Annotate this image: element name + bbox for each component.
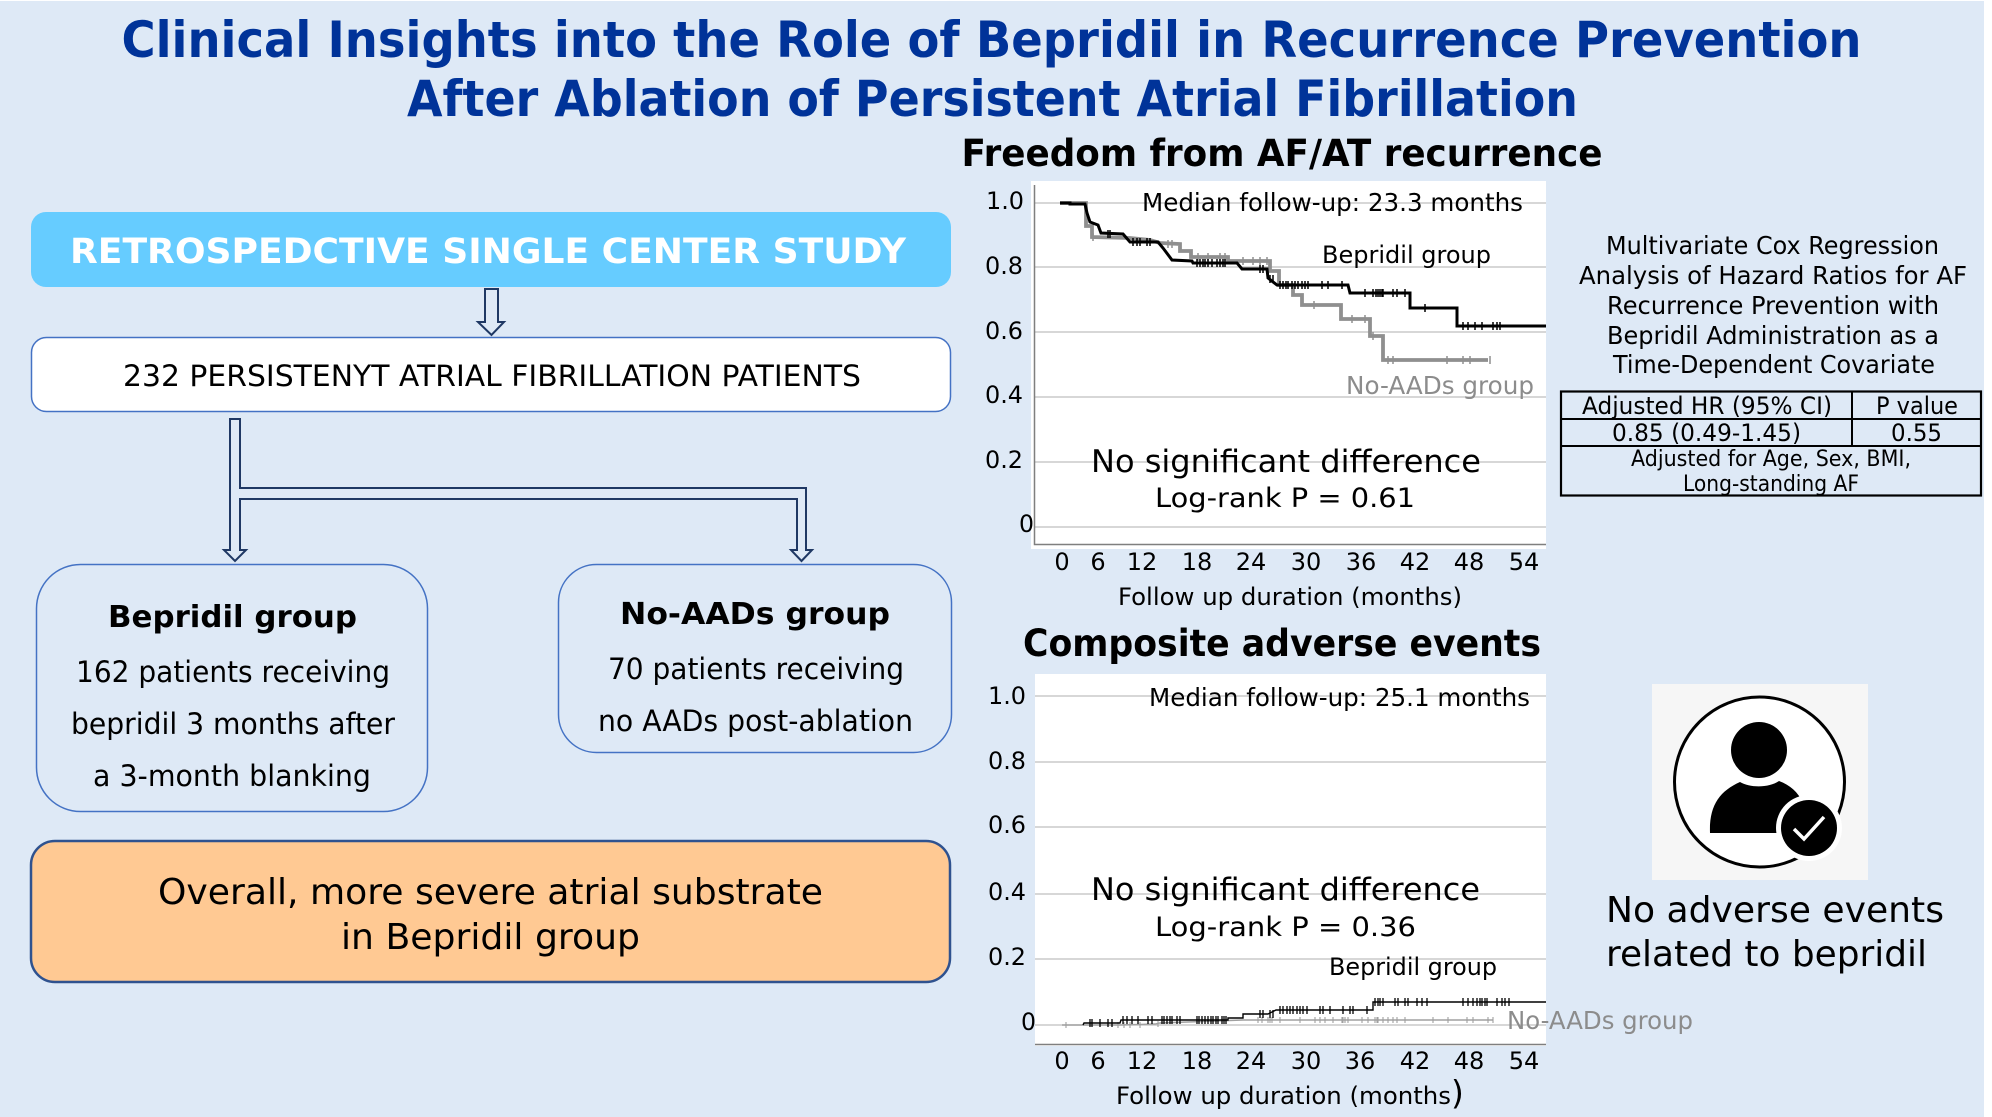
y axis labels: 0.8 xyxy=(985,252,1023,280)
y axis labels: 0 xyxy=(1019,510,1034,538)
Cox regression heading xyxy=(1579,231,1967,379)
x axis title xyxy=(1116,1073,1464,1112)
panel: No-AADs group: No-AADs group xyxy=(620,597,890,632)
x axis labels: 6 xyxy=(1090,1047,1106,1075)
y axis labels: 0.2 xyxy=(985,446,1023,474)
panel: No-AADs group xyxy=(558,564,952,752)
x axis labels: 54 xyxy=(1509,548,1539,576)
safety statement: No adverse events xyxy=(1606,890,1944,931)
y axis labels: 0.6 xyxy=(988,811,1026,839)
x axis labels: 54 xyxy=(1509,1047,1539,1075)
safety statement xyxy=(1606,890,1944,975)
result: no significant difference: No significant difference xyxy=(1091,444,1481,480)
y axis labels: 0.4 xyxy=(988,878,1026,906)
x axis title: Follow up duration (months xyxy=(1116,1082,1451,1110)
x axis labels: 42 xyxy=(1400,1047,1430,1075)
label: Bepridil group: Bepridil group xyxy=(1322,241,1491,269)
title: After Ablation of Persistent Atrial Fibrillation xyxy=(407,70,1578,128)
x axis labels: 0 xyxy=(1054,1047,1070,1075)
hazard ratio table: Long-standing AF xyxy=(1683,472,1859,497)
x axis title: ) xyxy=(1451,1073,1464,1112)
icon: person with check badge xyxy=(1652,684,1868,880)
panel: Bepridil group: 162 patients receiving xyxy=(76,655,390,689)
hazard ratio table xyxy=(1561,392,1981,497)
x axis labels: 36 xyxy=(1346,548,1376,576)
title: Clinical Insights into the Role of Bepridil in Recurrence Prevention xyxy=(122,11,1862,69)
hazard ratio table: 0.55 xyxy=(1891,419,1942,447)
study type banner: RETROSPEDCTIVE SINGLE CENTER STUDY xyxy=(70,232,907,272)
x axis labels: 12 xyxy=(1127,548,1157,576)
safety statement: related to bepridil xyxy=(1606,934,1927,975)
patient population box: 232 PERSISTENYT ATRIAL FIBRILLATION PATIENTS xyxy=(123,359,861,393)
x axis labels: 0 xyxy=(1054,548,1070,576)
panel: Bepridil group xyxy=(36,564,428,812)
label: Bepridil group: Bepridil group xyxy=(1329,953,1497,981)
x axis title: Follow up duration (months) xyxy=(1118,583,1462,611)
Cox regression heading: Time-Dependent Covariate xyxy=(1612,350,1935,379)
callout: atrial substrate xyxy=(31,841,950,982)
x axis labels: 48 xyxy=(1454,548,1484,576)
y axis labels: 0.2 xyxy=(988,943,1026,971)
x axis labels xyxy=(1054,1047,1539,1075)
y axis labels: 1.0 xyxy=(988,682,1026,710)
panel: Bepridil group: a 3-month blanking xyxy=(93,759,371,793)
x axis labels: 48 xyxy=(1454,1047,1484,1075)
x axis labels: 42 xyxy=(1400,548,1430,576)
result: no significant difference: No significant difference xyxy=(1091,872,1480,908)
hazard ratio table: 0.85 (0.49-1.45) xyxy=(1612,419,1801,447)
x axis labels: 30 xyxy=(1291,548,1321,576)
y axis labels: 0.4 xyxy=(985,381,1023,409)
patient population box xyxy=(32,338,950,412)
heading: composite adverse events: Composite adverse events xyxy=(1023,622,1541,665)
median follow-up note: Median follow-up: 23.3 months xyxy=(1142,188,1523,217)
Cox regression heading: Analysis of Hazard Ratios for AF xyxy=(1579,261,1967,290)
hazard ratio table: Adjusted for Age, Sex, BMI, xyxy=(1631,447,1911,472)
curve: No-AADs group xyxy=(1060,203,1490,364)
x axis labels: 18 xyxy=(1182,1047,1212,1075)
hazard ratio table: P value xyxy=(1876,392,1958,420)
y axis labels: 0.8 xyxy=(988,747,1026,775)
x axis labels: 18 xyxy=(1182,548,1212,576)
panel: No-AADs group: no AADs post-ablation xyxy=(598,704,913,738)
Cox regression heading: Recurrence Prevention with xyxy=(1607,291,1939,320)
y axis labels: 0 xyxy=(1021,1008,1036,1036)
y axis labels: 1.0 xyxy=(986,187,1024,215)
chart: composite adverse events xyxy=(988,674,1693,1112)
Cox regression heading: Multivariate Cox Regression xyxy=(1606,231,1939,260)
title xyxy=(122,11,1862,128)
panel: No-AADs group: 70 patients receiving xyxy=(608,652,904,686)
x axis labels xyxy=(1054,548,1539,576)
panel: Bepridil group: bepridil 3 months after xyxy=(71,707,395,741)
label: No-AADs group: No-AADs group xyxy=(1507,1006,1693,1035)
study type banner xyxy=(31,212,951,287)
label: No-AADs group: No-AADs group xyxy=(1346,371,1534,400)
median follow-up note: Median follow-up: 25.1 months xyxy=(1149,683,1530,712)
curve: Bepridil group xyxy=(1083,998,1546,1027)
panel: study design flow xyxy=(31,212,952,982)
x axis labels: 24 xyxy=(1236,1047,1266,1075)
chart: freedom from AF/AT recurrence xyxy=(985,181,1546,611)
arrow: banner to patients xyxy=(478,289,504,335)
y axis labels xyxy=(985,187,1034,538)
panel: Bepridil group: Bepridil group xyxy=(108,600,357,635)
x axis labels: 30 xyxy=(1291,1047,1321,1075)
y axis labels xyxy=(988,682,1036,1036)
Cox regression heading: Bepridil Administration as a xyxy=(1607,321,1939,350)
x axis labels: 6 xyxy=(1090,548,1106,576)
y axis labels: 0.6 xyxy=(985,317,1023,345)
callout: atrial substrate: Overall, more severe atrial substrate xyxy=(158,872,823,913)
result: log-rank P: Log-rank P = 0.61 xyxy=(1155,483,1415,514)
callout: atrial substrate: in Bepridil group xyxy=(341,917,640,958)
panel: Cox regression xyxy=(1561,231,1981,497)
arrow: split to two groups xyxy=(224,419,812,561)
x axis labels: 24 xyxy=(1236,548,1266,576)
result: log-rank P: Log-rank P = 0.36 xyxy=(1155,912,1416,943)
curve: Bepridil group xyxy=(1060,203,1546,330)
x axis labels: 12 xyxy=(1127,1047,1157,1075)
curve: No-AADs group xyxy=(1062,1017,1493,1028)
x axis labels: 36 xyxy=(1345,1047,1375,1075)
hazard ratio table: Adjusted HR (95% CI) xyxy=(1582,392,1832,420)
heading: freedom from recurrence: Freedom from AF/AT recurrence xyxy=(962,132,1602,175)
